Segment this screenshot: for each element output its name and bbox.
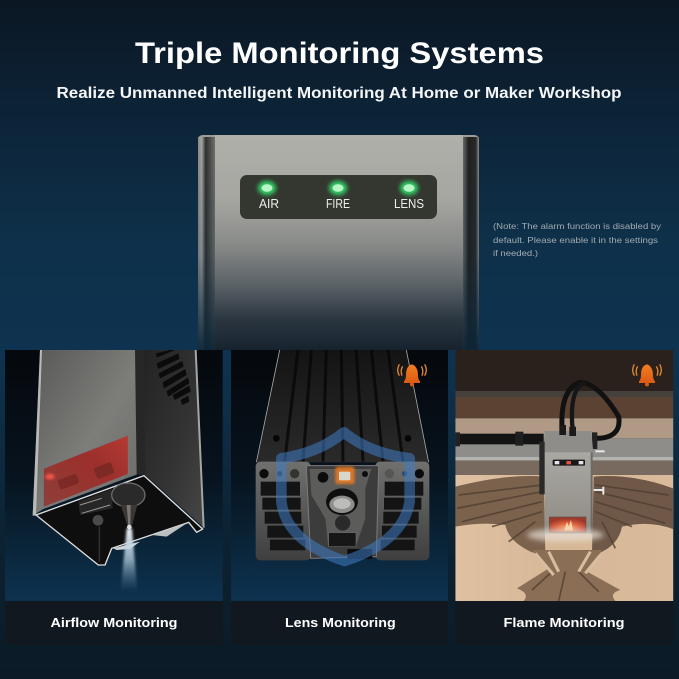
- photo: module engraving an eagle on wood: [455, 350, 673, 601]
- smoke: [527, 528, 604, 542]
- eagle: [455, 476, 673, 601]
- underside: [36, 476, 203, 565]
- caption: Airflow Monitoring: [50, 615, 177, 630]
- panel: flame monitoring: [455, 350, 673, 645]
- subtitle: Realize Unmanned Intelligent Monitoring At Home or Maker Workshop: [56, 85, 622, 102]
- illustration: module underside with air jet: [33, 350, 205, 592]
- LED: air: [258, 181, 279, 211]
- panel: airflow monitoring: [5, 350, 223, 645]
- caption: [455, 601, 673, 645]
- note text: (Note: The alarm function is disabled by: [493, 221, 662, 231]
- caption: Flame Monitoring: [503, 615, 624, 630]
- icon: alarm bell: [633, 364, 661, 386]
- caption: [5, 601, 223, 645]
- LED: fire: FIRE: [326, 196, 350, 211]
- illustration: module bottom with shield: [256, 350, 429, 561]
- cables: [562, 382, 619, 438]
- nozzle: [112, 483, 145, 507]
- right block: [375, 462, 429, 560]
- vents: [156, 350, 191, 405]
- air jet: [121, 528, 137, 592]
- note text: if needed.): [493, 248, 538, 258]
- window: [43, 435, 128, 507]
- laser module: [545, 431, 593, 453]
- centre block: [306, 466, 379, 558]
- shield: [281, 432, 410, 561]
- status panel: [240, 175, 437, 219]
- belt: [455, 434, 544, 444]
- icon: alarm bell: [398, 364, 426, 386]
- caption: Lens Monitoring: [285, 615, 396, 630]
- note text: [493, 221, 662, 258]
- LED: lens: [394, 181, 424, 211]
- caption: [231, 601, 448, 645]
- panel: lens monitoring: [231, 350, 448, 645]
- LED: lens: LENS: [394, 196, 424, 211]
- device: laser module front with status LEDs: [198, 135, 479, 350]
- carriage: [539, 442, 545, 494]
- LED: fire: [326, 181, 350, 211]
- left block: [256, 462, 311, 560]
- lens sensor: [335, 467, 355, 484]
- note text: default. Please enable it in the settings: [493, 235, 658, 245]
- title: Triple Monitoring Systems: [135, 37, 544, 70]
- LED: air: AIR: [259, 196, 279, 211]
